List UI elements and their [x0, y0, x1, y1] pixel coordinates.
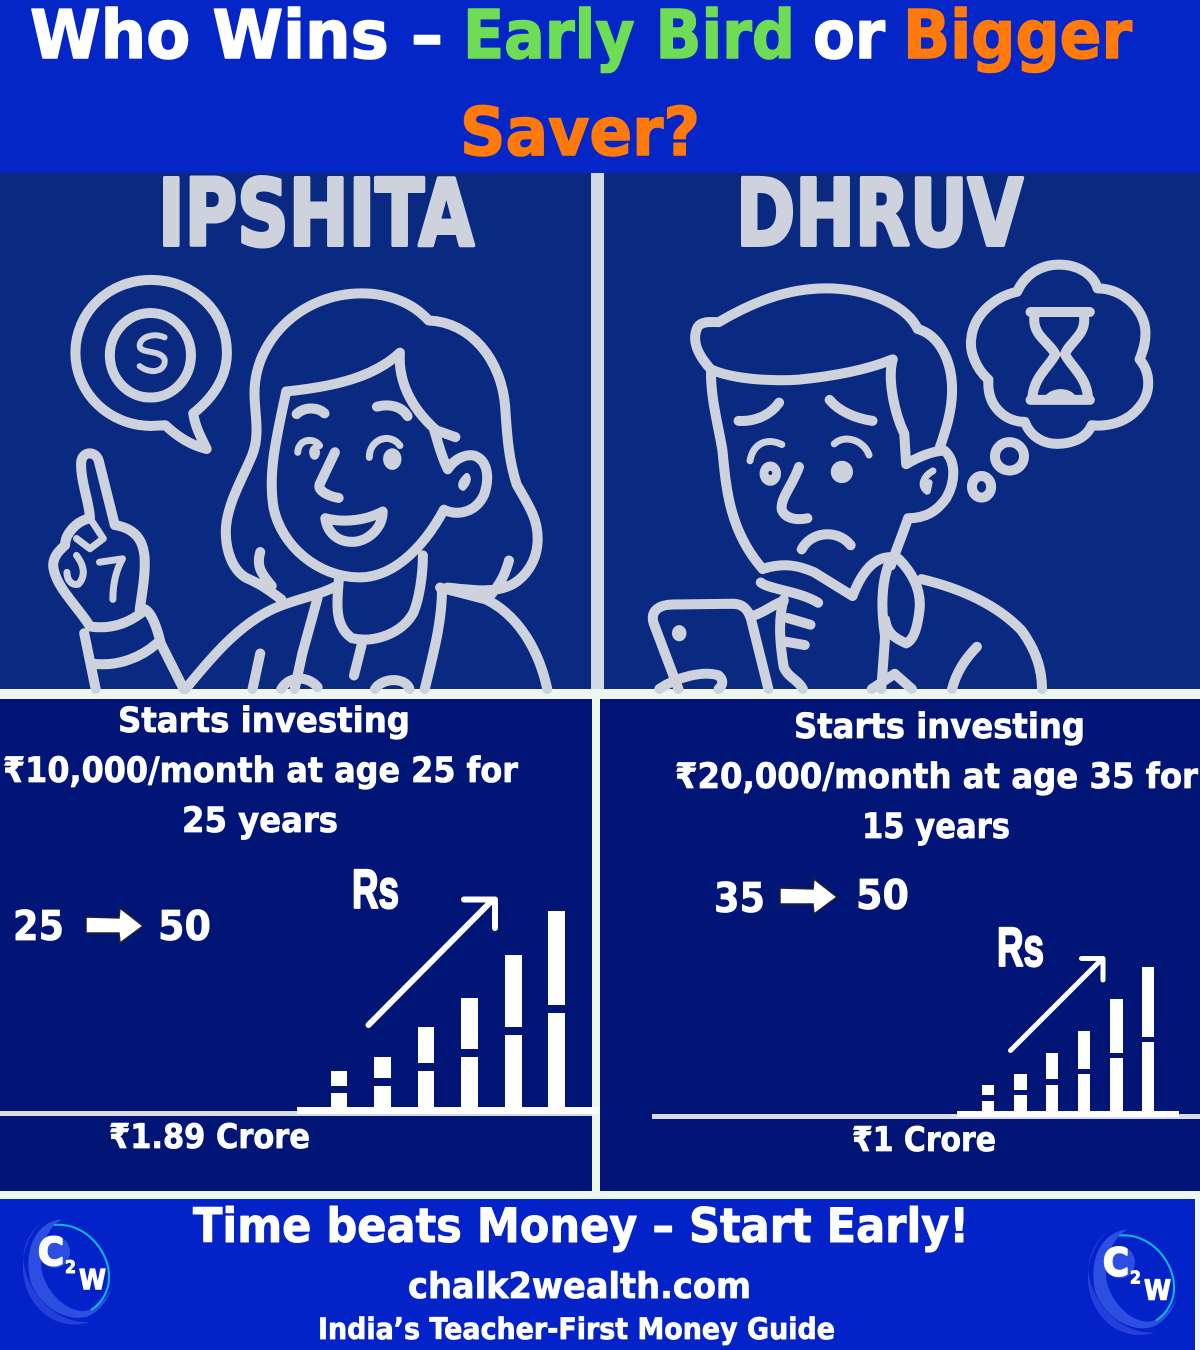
title line 1	[30, 0, 1132, 74]
bar chart: growth over 15 years	[652, 967, 1200, 1119]
age range 35 to 50: 35	[714, 874, 765, 922]
logo: right C2W: W	[1144, 1274, 1171, 1306]
subtitle: India’s Teacher-First Money Guide	[318, 1312, 835, 1346]
logo: left C2W: W	[79, 1263, 106, 1296]
age range 35 to 50: 50	[856, 871, 909, 919]
text: Ipshita investment plan: Starts investing	[118, 701, 410, 741]
label: Rs: Rs	[997, 916, 1044, 978]
text: Ipshita investment plan: 25 years	[182, 801, 338, 841]
result: 1.89 crore: ₹1.89 Crore	[109, 1117, 310, 1157]
hand on chin	[761, 557, 891, 689]
panel: Ipshita plan	[0, 699, 599, 1191]
arrow: rising trend	[368, 900, 495, 1025]
face	[272, 353, 487, 577]
icon: speech bubble with coin	[75, 280, 227, 449]
raised pointing hand	[53, 453, 184, 689]
text: Dhruv investment plan: Starts investing	[794, 707, 1085, 747]
logo: left C2W: 2	[65, 1257, 76, 1278]
text: Dhruv investment plan	[675, 707, 1199, 847]
tagline: Time beats Money – Start Early!	[193, 1199, 969, 1254]
character: Ipshita pointing with coin speech bubble	[53, 280, 547, 689]
result: 1 crore: ₹1 Crore	[852, 1120, 996, 1160]
logo: right C2W: 2	[1130, 1268, 1141, 1288]
age range 25 to 50: 50	[158, 902, 211, 950]
panel: Dhruv plan	[600, 699, 1200, 1191]
name: Dhruv: DHRUV	[736, 160, 1023, 267]
logo: left C2W: C	[38, 1230, 64, 1274]
title line 2: Saver?	[460, 93, 700, 171]
logo: left C2W	[23, 1219, 112, 1325]
phone	[653, 601, 784, 689]
neck and jacket	[186, 555, 547, 689]
logo: right C2W: C	[1103, 1240, 1129, 1284]
footer band	[0, 1199, 1195, 1350]
age range 35 to 50	[714, 871, 909, 922]
worried face	[739, 400, 933, 549]
hair	[226, 293, 538, 599]
center divider	[591, 173, 604, 689]
bar chart: growth over 25 years	[0, 911, 599, 1116]
label: Rs: Rs	[352, 858, 399, 920]
name: Ipshita: IPSHITA	[158, 160, 474, 267]
logo: right C2W	[1088, 1230, 1177, 1335]
collar, tie and shoulder	[872, 559, 1042, 689]
age range 25 to 50: 25	[13, 902, 64, 950]
hair and head outline	[695, 288, 953, 569]
website: chalk2wealth.com	[408, 1266, 751, 1307]
panel: Ipshita illustration	[0, 160, 591, 689]
arrow: rising trend	[1010, 958, 1103, 1050]
panel: Dhruv illustration	[604, 160, 1200, 689]
header band	[0, 0, 1200, 173]
icon: thought cloud with hourglass	[971, 265, 1148, 498]
text: Dhruv investment plan: 15 years	[862, 807, 1010, 847]
character: Dhruv worried with phone and hourglass thought	[653, 265, 1148, 689]
age range 25 to 50	[13, 902, 211, 950]
text: Ipshita investment plan	[3, 701, 519, 841]
text: Ipshita investment plan: ₹10,000/month at age 25 for	[3, 751, 519, 791]
